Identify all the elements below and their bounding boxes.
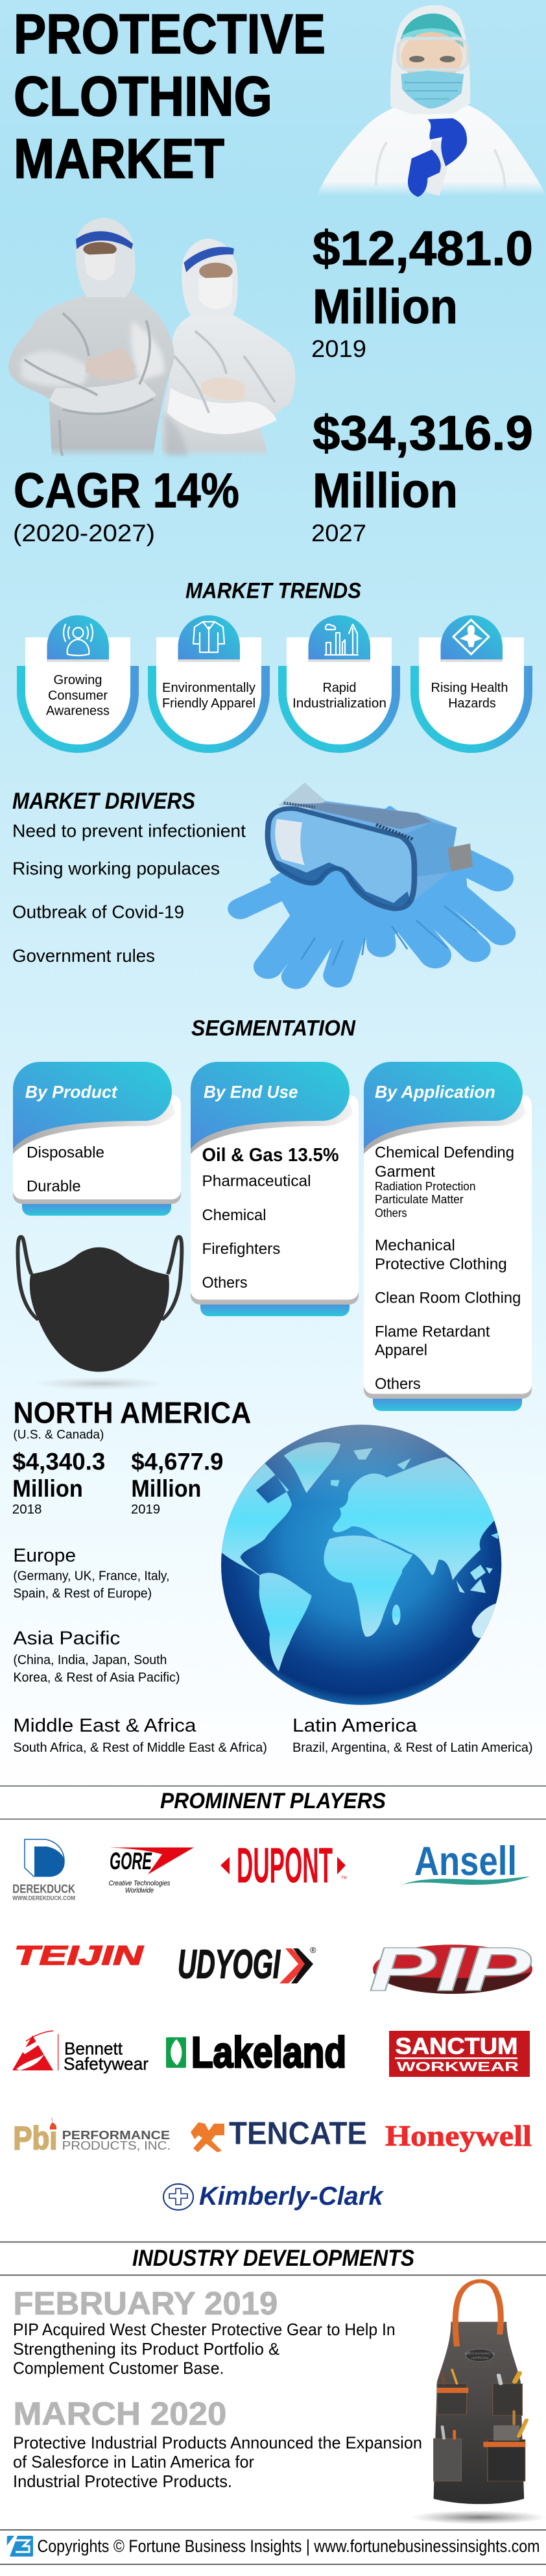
stat: 2019 market value: Million <box>313 279 458 334</box>
title: PROTECTIVE <box>14 3 326 66</box>
logo: ansell: Ansell <box>414 1839 517 1884</box>
stat: 2027 market value: 2027 <box>311 520 366 546</box>
panel: industry developments header: INDUSTRY DEVELOPMENTS <box>132 2246 414 2271</box>
stat: north america 2019 <box>131 1449 223 1517</box>
panel: by application: Others <box>375 1206 407 1220</box>
list: market drivers: Need to prevent infectionient <box>12 820 246 841</box>
logo: gore: GORE <box>110 1848 152 1874</box>
continent: madagascar <box>392 1604 401 1625</box>
panel: environmentally friendly apparel <box>148 615 270 753</box>
panel: rising health hazards <box>410 615 532 753</box>
text: europe: (Germany, UK, France, Italy, <box>13 1569 169 1584</box>
logo: dupont <box>220 1838 347 1894</box>
goggles <box>268 783 473 909</box>
stat: CAGR: (2020-2027) <box>13 520 155 546</box>
text: february 2019 development <box>13 2285 396 2378</box>
text: march 2020 development: of Salesforce in Latin America for <box>13 2452 254 2472</box>
text: latin america: Brazil, Argentina, & Rest of Latin America) <box>292 1741 533 1755</box>
text: europe: Spain, & Rest of Europe) <box>13 1587 152 1601</box>
image: globe <box>218 1425 501 1705</box>
logo: pbi performance products <box>13 2117 171 2156</box>
panel: prominent players header: PROMINENT PLAYERS <box>160 1789 386 1813</box>
panel: by product: By Product <box>25 1083 118 1102</box>
panel: by end use: Oil & Gas 13.5% <box>202 1145 339 1166</box>
heading: segmentation: SEGMENTATION <box>191 1016 356 1041</box>
logo: pbi performance products: Pbi <box>13 2120 57 2156</box>
panel: by application <box>364 1062 532 1411</box>
text: march 2020 development <box>13 2396 422 2491</box>
stat: north america 2018 <box>12 1449 105 1517</box>
logo: tencate: TENCATE <box>229 2116 367 2152</box>
image: mechanic's apron: MECHANIC'S <box>465 2352 495 2355</box>
panel: by application: Others <box>375 1375 421 1393</box>
stat: 2027 market value <box>311 406 533 546</box>
text: middle east and africa <box>13 1715 267 1755</box>
stat: north america 2019: 2019 <box>131 1503 160 1517</box>
logo: dupont: DUPONT <box>237 1838 333 1894</box>
panel: by application: Particulate Matter <box>375 1192 464 1206</box>
panel: by application: Mechanical <box>375 1237 455 1255</box>
gloves <box>241 807 501 977</box>
panel: by end use: Others <box>202 1274 248 1292</box>
icon: lab coat <box>193 622 224 652</box>
logo: derekduck: WWW.DEREKDUCK.COM <box>12 1895 75 1902</box>
panel: by application: Chemical Defending <box>375 1144 514 1162</box>
logo: bennett safetywear: Bennett <box>64 2039 123 2059</box>
icon: person with signal waves <box>64 624 93 656</box>
list: market drivers: Government rules <box>12 946 155 966</box>
apron tools <box>442 2370 527 2438</box>
list: market drivers: Rising working populaces <box>12 858 220 879</box>
panel: by end use: By End Use <box>204 1083 298 1102</box>
text: asia pacific: (China, India, Japan, South <box>13 1653 167 1667</box>
text: europe <box>13 1545 169 1601</box>
panel: rapid industrialization: Rapid <box>323 681 357 695</box>
panel: growing consumer awareness: Consumer <box>48 689 108 703</box>
text: latin america: Latin America <box>292 1715 418 1736</box>
logo: sanctum workwear: WORKWEAR <box>397 2060 519 2074</box>
title <box>14 3 326 190</box>
image: mechanic's apron: APRON <box>471 2357 489 2360</box>
logo: lakeland: Lakeland <box>191 2028 346 2077</box>
logo: pbi performance products: PRODUCTS, INC. <box>62 2139 171 2152</box>
text: asia pacific: Asia Pacific <box>13 1628 120 1649</box>
image: goggles on blue gloves <box>241 783 501 977</box>
logo: pbi performance products: PERFORMANCE <box>62 2129 170 2142</box>
icon: fortune business insights logo <box>7 2536 33 2557</box>
text: middle east and africa: Middle East & Africa <box>13 1715 196 1736</box>
text: february 2019 development: FEBRUARY 2019 <box>13 2285 278 2322</box>
stat: north america 2019: Million <box>131 1475 201 1502</box>
panel: environmentally friendly apparel: Friendly Apparel <box>162 696 255 711</box>
stat: north america 2018: $4,340.3 <box>12 1449 105 1475</box>
panel: by application: Radiation Protection <box>375 1179 476 1193</box>
text: asia pacific: Korea, & Rest of Asia Pacific) <box>13 1671 180 1685</box>
panel: by product: Disposable <box>27 1144 104 1162</box>
panel: by application: Clean Room Clothing <box>375 1289 521 1307</box>
islands <box>331 1448 498 1593</box>
logo: udyogi: ® <box>310 1945 316 1955</box>
stat: 2019 market value: 2019 <box>311 336 366 362</box>
logo: kimberly-clark: Kimberly-Clark <box>199 2182 384 2211</box>
text: middle east and africa: South Africa, & Rest of Middle East & Africa) <box>13 1741 267 1755</box>
panel: by application: By Application <box>375 1083 495 1102</box>
image: mechanic's apron <box>411 2281 546 2524</box>
panel: by application: Flame Retardant <box>375 1323 490 1340</box>
stat: CAGR: CAGR 14% <box>14 463 239 518</box>
list: market drivers <box>12 820 246 966</box>
panel: by end use: Firefighters <box>202 1240 280 1258</box>
continent: greenland <box>284 1442 340 1493</box>
panel: by product: Durable <box>27 1177 81 1196</box>
text: february 2019 development: Strengthening its Product Portfolio & <box>13 2339 279 2359</box>
text: march 2020 development: Industrial Protective Products. <box>13 2472 232 2491</box>
stat: north america 2018: 2018 <box>12 1503 42 1517</box>
text: europe: Europe <box>13 1545 76 1566</box>
list: market drivers: Outbreak of Covid-19 <box>12 902 184 922</box>
heading: north america: (U.S. & Canada) <box>13 1427 104 1441</box>
stat: 2027 market value: Million <box>313 463 458 518</box>
stat: 2019 market value: $12,481.0 <box>313 221 533 275</box>
heading: market drivers: MARKET DRIVERS <box>12 789 195 814</box>
panel: by end use <box>191 1062 359 1316</box>
panel: growing consumer awareness: Awareness <box>46 704 110 718</box>
footer <box>0 2529 546 2565</box>
stat: 2027 market value: $34,316.9 <box>313 406 533 460</box>
panel: by application: Apparel <box>375 1342 427 1359</box>
text: february 2019 development: Complement Customer Base. <box>13 2359 224 2378</box>
logo: gore: Creative Technologies <box>109 1880 171 1887</box>
icon: factories with rising arrow <box>325 624 358 655</box>
image: black face mask <box>18 1236 182 1390</box>
text: march 2020 development: Protective Industrial Products Announced the Expansion <box>13 2433 422 2452</box>
logo: gore <box>109 1847 194 1895</box>
panel: environmentally friendly apparel: Environmentally <box>162 681 255 695</box>
apron pockets <box>434 2384 525 2481</box>
logo: derekduck: DEREKDUCK <box>12 1883 75 1896</box>
logo: honeywell: Honeywell <box>385 2120 532 2152</box>
panel: by end use: Chemical <box>202 1207 266 1224</box>
panel: by application: Garment <box>375 1163 435 1181</box>
panel: rising health hazards: Hazards <box>448 696 496 711</box>
title: CLOTHING <box>14 66 272 128</box>
worker left <box>8 218 174 458</box>
logo: dupont: TM <box>341 1876 347 1880</box>
logo: bennett safetywear <box>12 2031 148 2074</box>
logo: derekduck <box>12 1839 75 1902</box>
heading: north america: NORTH AMERICA <box>13 1396 251 1430</box>
panel: rapid industrialization <box>278 615 400 753</box>
text: february 2019 development: PIP Acquired West Chester Protective Gear to Help In <box>13 2320 396 2339</box>
logo: bennett safetywear: Safetywear <box>64 2054 148 2074</box>
stat: CAGR <box>13 463 239 546</box>
panel: rapid industrialization: Industrialization <box>292 696 386 711</box>
panel: by end use: Pharmaceutical <box>202 1173 311 1190</box>
logo: sanctum workwear <box>389 2031 530 2077</box>
stat: north america 2018: Million <box>12 1475 83 1502</box>
stat: north america 2019: $4,677.9 <box>131 1449 223 1475</box>
icon: health hazard diamond <box>453 620 489 654</box>
stat: 2019 market value <box>311 221 533 362</box>
continent: south america <box>259 1573 312 1671</box>
logo: gore: Worldwide <box>125 1887 154 1895</box>
continent: north america <box>218 1464 292 1578</box>
logo: teijin: TEIJIN <box>14 1940 145 1970</box>
panel: by application: Protective Clothing <box>375 1256 507 1273</box>
text: asia pacific <box>13 1628 180 1685</box>
logo: pip: PIP <box>369 1935 532 2004</box>
panel: growing consumer awareness: Growing <box>53 673 102 687</box>
heading: market trends: MARKET TRENDS <box>185 579 361 604</box>
logo: pip <box>369 1935 532 2004</box>
photo: worker with goggles and blue gloves <box>317 5 546 197</box>
worker right <box>161 238 295 458</box>
continent: australia <box>472 1602 498 1638</box>
text: latin america <box>292 1715 533 1755</box>
panel: rising health hazards: Rising Health <box>431 681 508 695</box>
continent: africa <box>324 1536 412 1637</box>
text: march 2020 development: MARCH 2020 <box>13 2396 226 2432</box>
title: MARKET <box>14 128 224 190</box>
continent: eurasia <box>333 1457 496 1580</box>
panel: growing consumer awareness <box>17 615 139 753</box>
logo: udyogi: UDYOGI <box>178 1942 281 1987</box>
panel: by product <box>13 1062 181 1216</box>
photo: two workers in protective suits with face shields <box>8 218 295 458</box>
logo: sanctum workwear: SANCTUM <box>396 2034 517 2059</box>
